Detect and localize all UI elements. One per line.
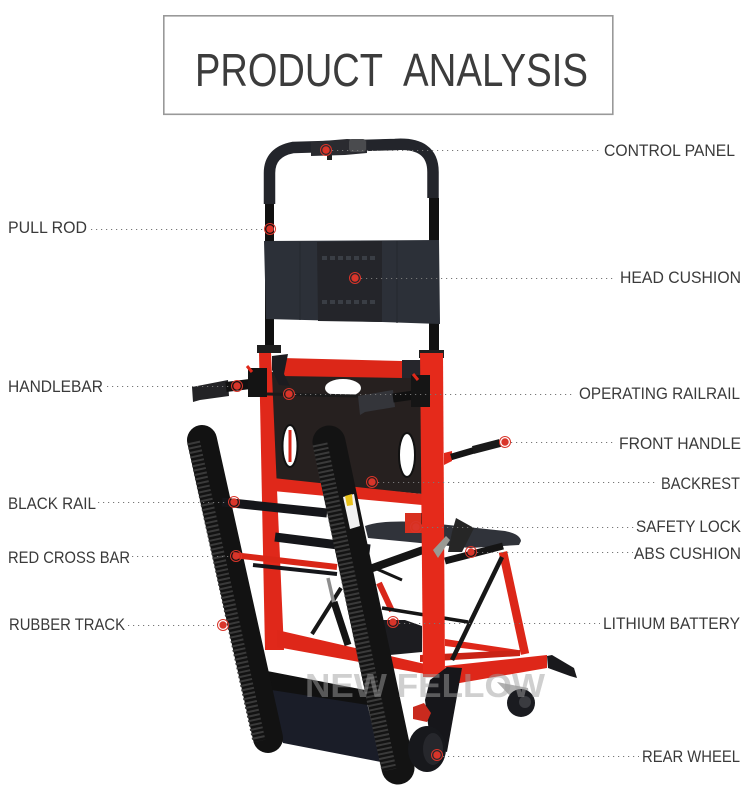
callout: lithium battery xyxy=(388,614,740,633)
callout: head cushion xyxy=(350,268,741,287)
storage box xyxy=(262,670,381,762)
red lower cross member xyxy=(273,478,422,505)
brake xyxy=(413,703,431,722)
title: ANALYSIS xyxy=(403,44,588,96)
under bar xyxy=(253,565,337,574)
backrest plate xyxy=(271,372,422,494)
rear seat leg xyxy=(379,583,392,611)
watermark: NEW FELLOW xyxy=(305,667,546,704)
callout: head cushion: HEAD CUSHION xyxy=(620,268,741,287)
gas strut xyxy=(328,578,348,645)
callout: lithium battery: LITHIUM BATTERY xyxy=(603,614,740,633)
foot handle xyxy=(547,655,577,678)
callout: front handle xyxy=(500,434,741,453)
callout: safety lock xyxy=(410,517,742,536)
rear wheel xyxy=(408,726,446,772)
callout: front handle: FRONT HANDLE xyxy=(619,434,741,453)
front leg red xyxy=(503,552,525,654)
push handle xyxy=(270,144,433,204)
middle bar xyxy=(267,394,358,396)
seat braces xyxy=(312,557,502,660)
wheel bracket xyxy=(425,667,462,752)
back strap xyxy=(272,354,290,386)
black rail bar xyxy=(222,502,327,513)
callout: abs cushion: ABS CUSHION xyxy=(634,544,741,563)
callout: rubber track: RUBBER TRACK xyxy=(9,615,126,634)
frame caps xyxy=(257,345,444,358)
callout: pull rod xyxy=(8,218,276,237)
seat strap xyxy=(448,518,474,552)
callout: operating rail xyxy=(284,384,740,403)
callout: abs cushion xyxy=(466,544,741,563)
safety lock xyxy=(405,513,432,533)
lower black bar xyxy=(275,537,370,549)
pull rods xyxy=(265,198,439,353)
warning sticker xyxy=(343,494,360,529)
callout: handlebar xyxy=(8,377,242,396)
callout: backrest: BACKREST xyxy=(661,474,740,493)
callout: backrest xyxy=(366,474,740,493)
bottom red frame xyxy=(277,630,547,685)
front red upright xyxy=(420,353,445,677)
callout: red cross bar: RED CROSS BAR xyxy=(8,548,130,567)
right track xyxy=(320,442,398,770)
callout: safety lock: SAFETY LOCK xyxy=(636,517,742,536)
red frame rear upright xyxy=(259,352,284,650)
red top cross member xyxy=(282,358,402,378)
callout: control panel xyxy=(320,141,735,160)
callout: red cross bar xyxy=(8,548,242,567)
stair chair product illustration xyxy=(192,139,577,772)
callout: handlebar: HANDLEBAR xyxy=(8,377,103,396)
seat xyxy=(365,522,521,580)
callout: pull rod: PULL ROD xyxy=(8,218,87,237)
red cross bar xyxy=(233,555,337,567)
callout: control panel: CONTROL PANEL xyxy=(604,141,735,160)
crossbar xyxy=(382,608,468,622)
left handlebar xyxy=(192,366,267,402)
title xyxy=(164,16,613,114)
left track xyxy=(194,440,268,741)
lithium battery xyxy=(382,620,422,655)
seat belt buckle xyxy=(433,536,450,558)
callout: black rail: BLACK RAIL xyxy=(8,494,96,513)
title: PRODUCT xyxy=(195,44,383,96)
callout: rear wheel xyxy=(432,747,740,766)
control panel box xyxy=(311,139,367,160)
callout: black rail xyxy=(8,494,240,513)
caster wheel xyxy=(497,682,535,717)
front handle xyxy=(444,443,500,465)
head cushion xyxy=(264,240,440,324)
callout: rubber track xyxy=(9,615,228,634)
right handlebar xyxy=(358,374,430,415)
